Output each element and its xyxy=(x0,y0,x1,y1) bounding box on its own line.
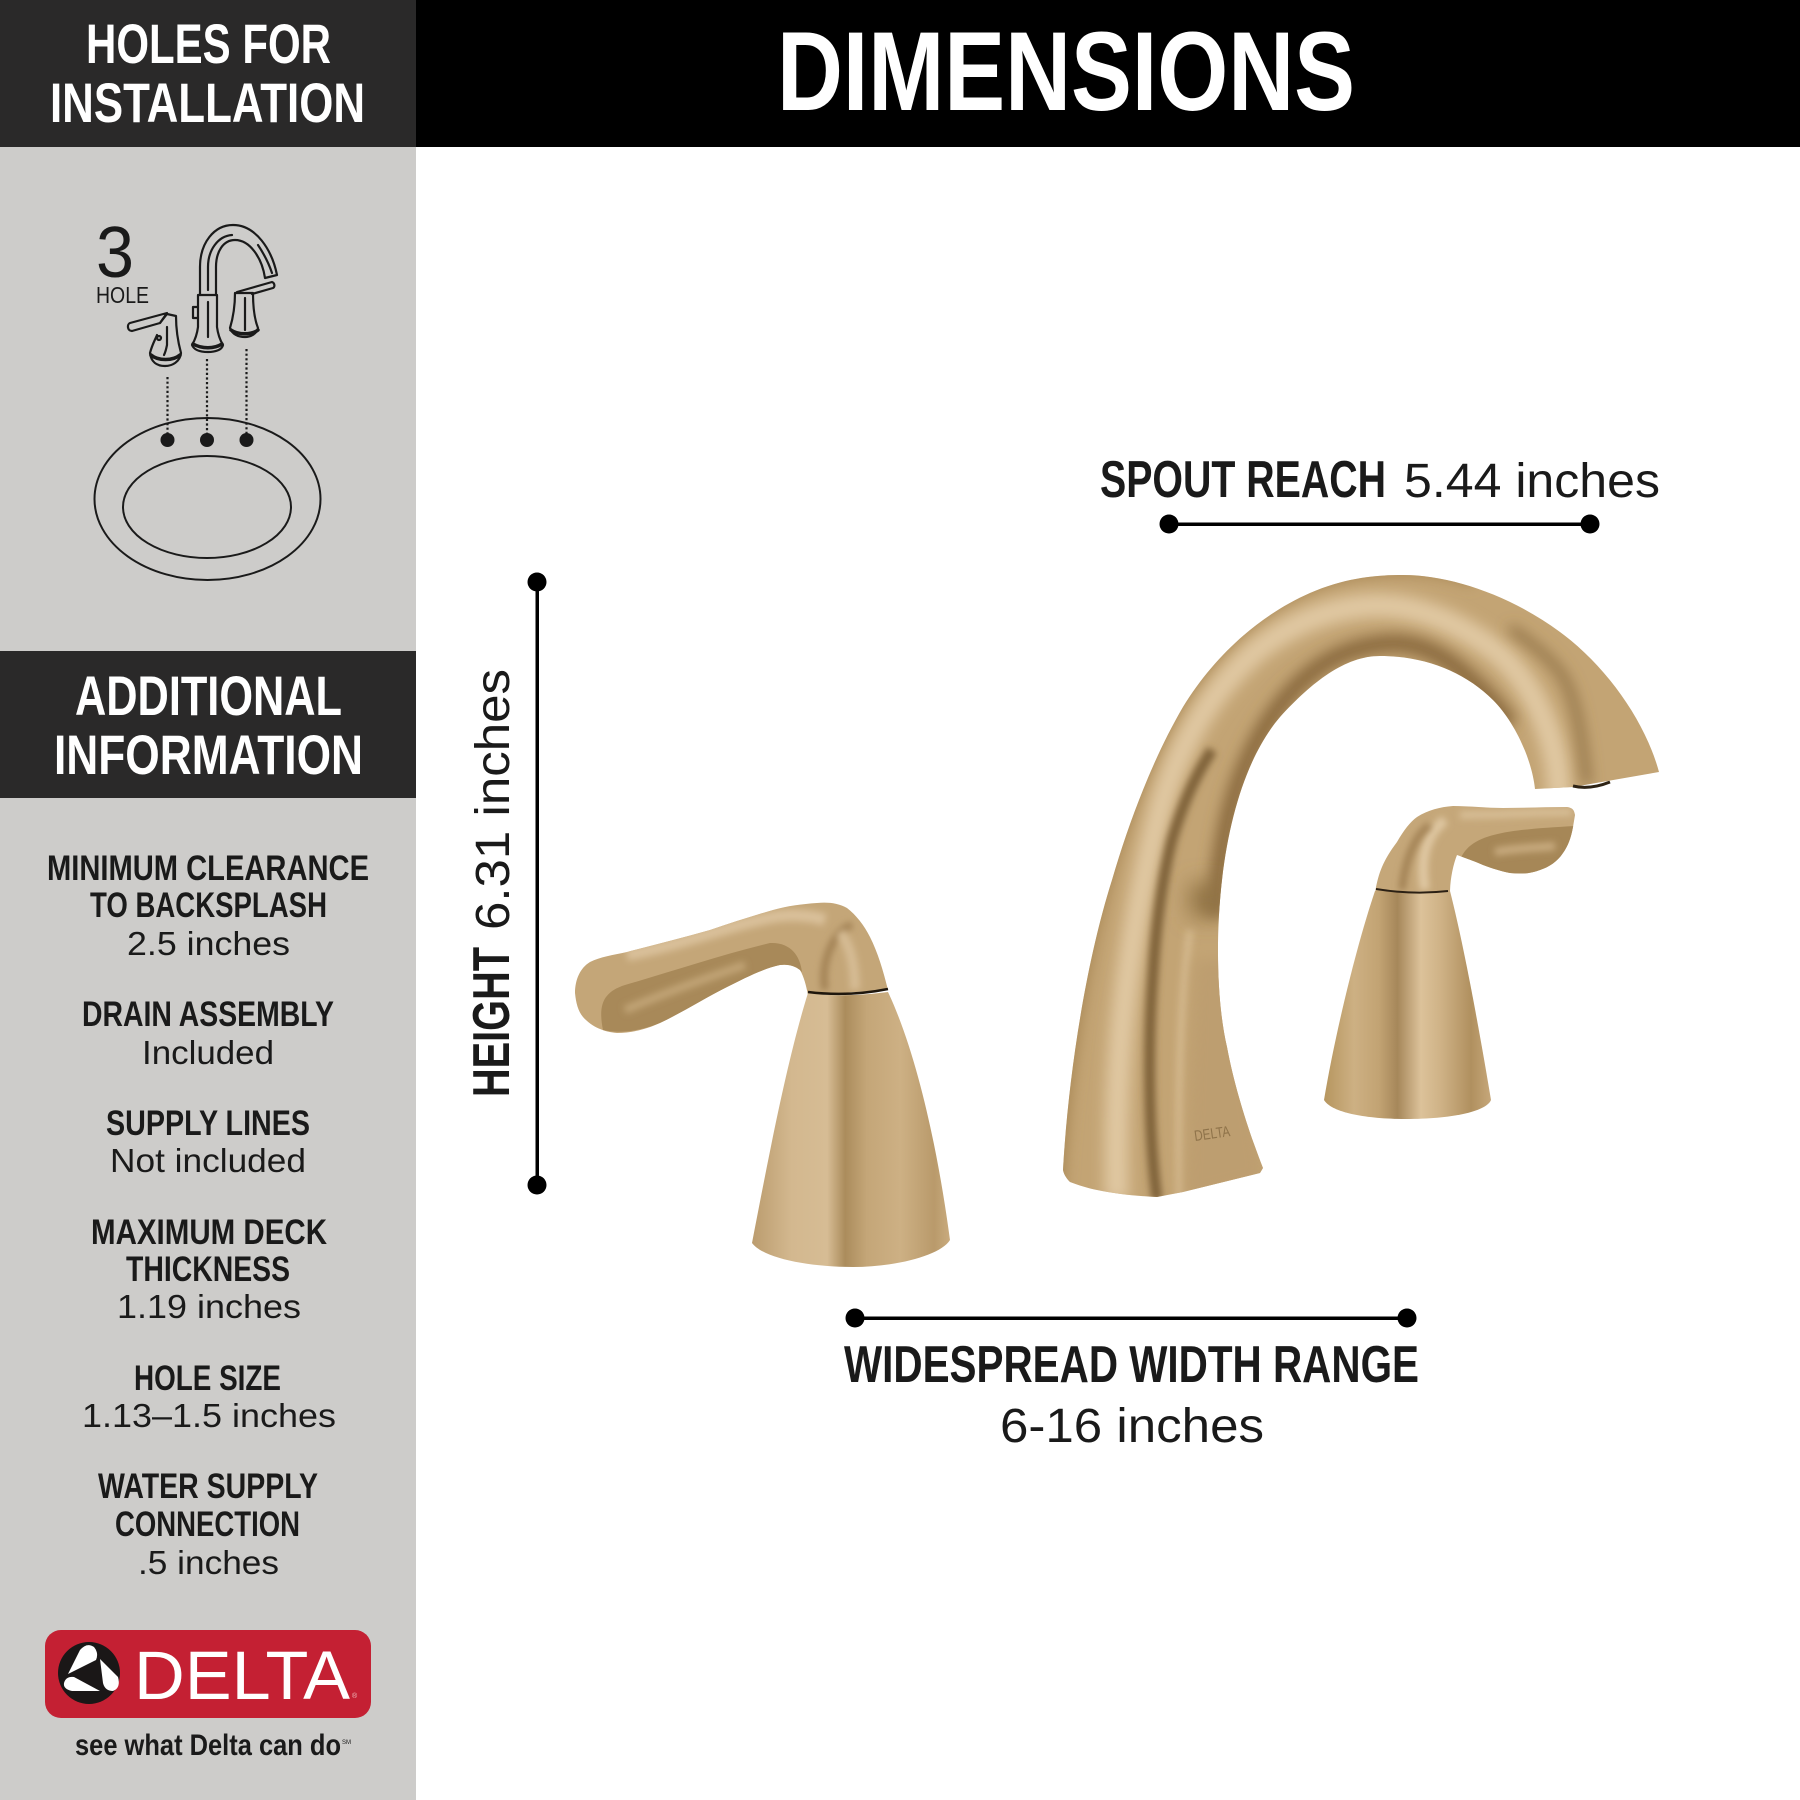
spec: water supply connection: .5 inches xyxy=(138,1544,279,1581)
heading: holes for installation: HOLES FOR xyxy=(86,12,331,75)
spec: water supply connection: CONNECTION xyxy=(115,1505,300,1544)
icon: outline faucet xyxy=(128,225,277,366)
line: width measure xyxy=(846,1308,1416,1328)
faucet: right handle xyxy=(1324,800,1580,1119)
label: spout reach 5.44 inches: SPOUT REACH xyxy=(1100,451,1386,509)
label: widespread width range 6-16 inches xyxy=(844,1336,1419,1453)
label: 3 hole: HOLE xyxy=(96,282,149,308)
label: 3 hole xyxy=(96,213,149,308)
spec: supply lines: SUPPLY LINES xyxy=(106,1104,310,1143)
spec: minimum clearance: 2.5 inches xyxy=(127,925,290,962)
tagline: SM xyxy=(342,1740,351,1746)
icon: three hole sink diagram xyxy=(94,213,320,580)
heading: additional information xyxy=(0,651,416,798)
spec: maximum deck thickness: MAXIMUM DECK xyxy=(91,1213,327,1252)
spec: water supply connection: WATER SUPPLY xyxy=(98,1467,318,1506)
spec: minimum clearance: TO BACKSPLASH xyxy=(90,886,327,925)
spec: minimum clearance xyxy=(47,849,369,962)
heading: additional information: INFORMATION xyxy=(54,723,363,786)
spec: drain assembly: DRAIN ASSEMBLY xyxy=(82,995,334,1034)
heading: holes for installation xyxy=(0,0,416,147)
spec: drain assembly xyxy=(82,995,334,1071)
logo: delta xyxy=(45,1630,371,1718)
panel: left sidebar xyxy=(0,147,416,1800)
faucet: spout xyxy=(1050,560,1680,1210)
spec: drain assembly: Included xyxy=(142,1034,274,1071)
icon: sink basin with holes xyxy=(94,418,320,580)
heading: holes for installation: INSTALLATION xyxy=(50,71,365,134)
spec: supply lines: Not included xyxy=(110,1142,306,1179)
label: spout reach 5.44 inches: 5.44 inches xyxy=(1404,455,1660,508)
spec: maximum deck thickness: 1.19 inches xyxy=(117,1288,301,1325)
dimension: widespread width range xyxy=(844,1308,1419,1453)
title: dimensions: DIMENSIONS xyxy=(777,9,1355,134)
label: widespread width range 6-16 inches: WIDESPREAD WIDTH RANGE xyxy=(844,1336,1419,1394)
label: 3 hole: 3 xyxy=(96,213,134,293)
label: height 6.31 inches xyxy=(463,669,521,1097)
spec: maximum deck thickness: THICKNESS xyxy=(126,1250,290,1289)
panel: dimensions header bar xyxy=(416,0,1800,147)
dimension: height xyxy=(463,572,546,1194)
spec: minimum clearance: MINIMUM CLEARANCE xyxy=(47,849,369,888)
label: height 6.31 inches: HEIGHT xyxy=(463,947,521,1097)
spec: supply lines xyxy=(106,1104,310,1179)
label: spout reach 5.44 inches xyxy=(1100,451,1660,509)
spec: hole size: HOLE SIZE xyxy=(134,1359,281,1398)
logo: delta: ® xyxy=(352,1692,358,1700)
spec: maximum deck thickness xyxy=(91,1213,327,1325)
heading: additional information: ADDITIONAL xyxy=(75,664,342,727)
faucet: left handle xyxy=(570,900,950,1267)
label: widespread width range 6-16 inches: 6-16 inches xyxy=(1000,1400,1264,1453)
dotted guide lines xyxy=(168,349,246,440)
logo: embossed delta mark: DELTA xyxy=(1193,1123,1231,1145)
spec: hole size: 1.13–1.5 inches xyxy=(82,1397,336,1434)
logo: delta: DELTA xyxy=(134,1637,350,1714)
dimension: spout reach xyxy=(1100,451,1660,534)
spec: hole size xyxy=(82,1359,336,1434)
spec: water supply connection xyxy=(98,1467,318,1581)
line: spout reach measure xyxy=(1160,514,1600,534)
tagline: see what Delta can do xyxy=(75,1729,341,1762)
label: height 6.31 inches: 6.31 inches xyxy=(467,669,520,930)
line: height measure xyxy=(528,572,546,1194)
